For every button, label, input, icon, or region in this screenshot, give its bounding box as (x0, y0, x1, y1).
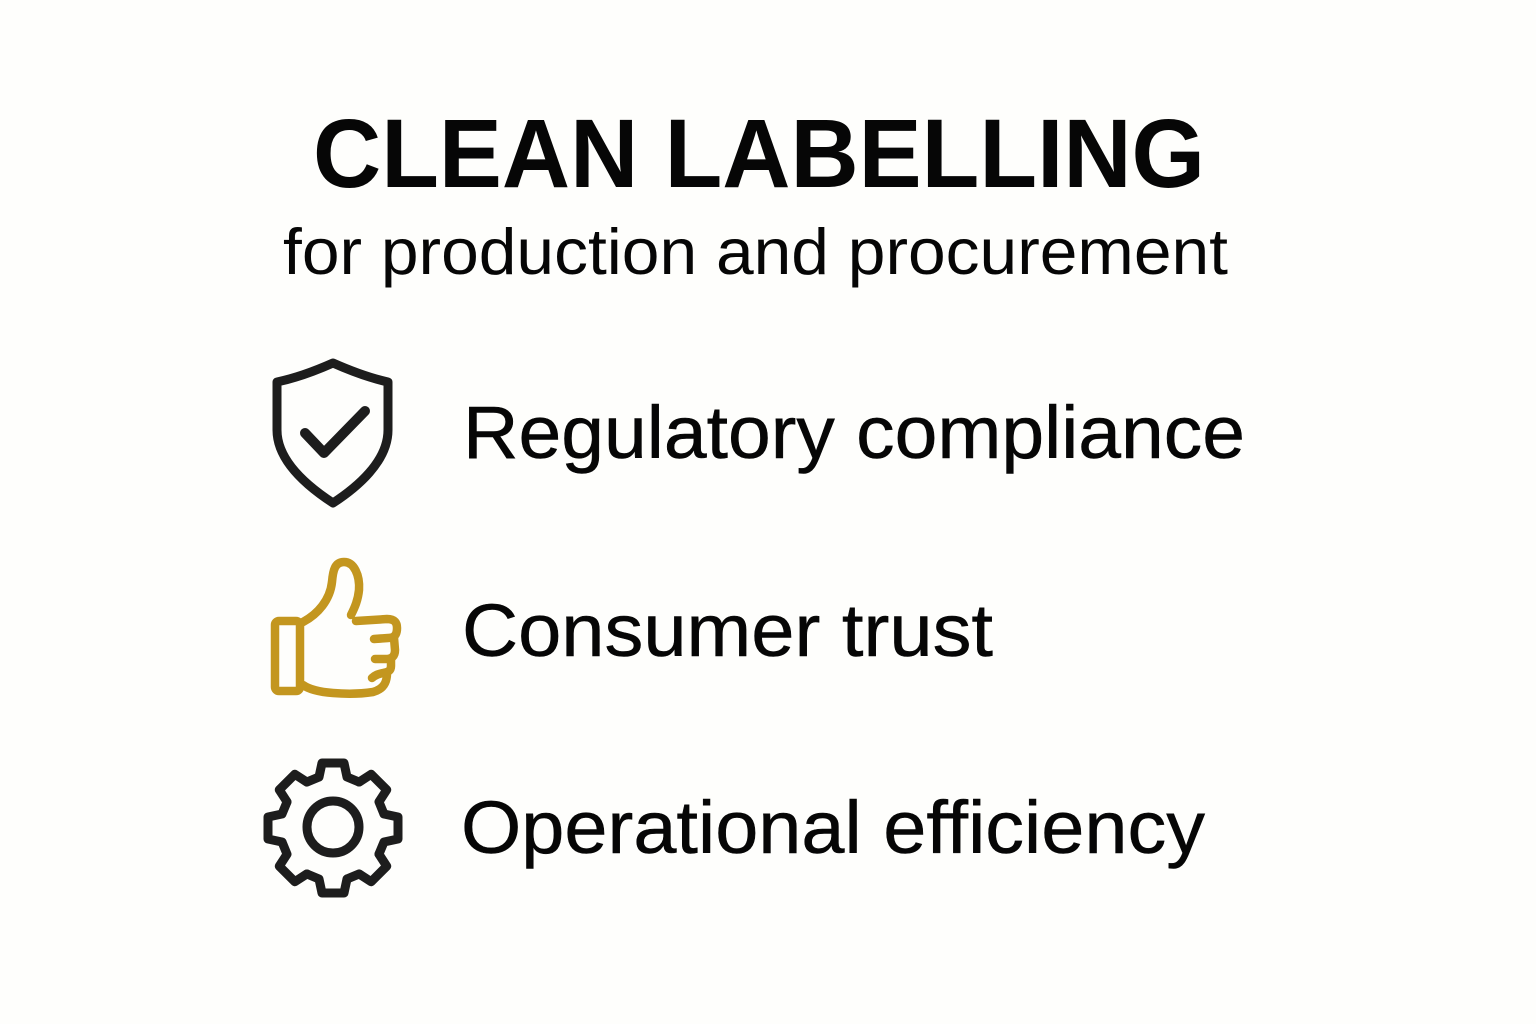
item: consumer trust (275, 562, 993, 694)
item: regulatory compliance (277, 363, 1245, 503)
icon: thumbs up (275, 562, 397, 694)
label: consumer trust: Consumer trust (462, 589, 993, 672)
title: CLEAN LABELLING (313, 99, 1205, 208)
subtitle: for production and procurement (283, 215, 1228, 288)
item: operational efficiency (268, 763, 1205, 893)
icon: shield with check mark (277, 363, 388, 503)
icon: gear (268, 763, 398, 893)
label: regulatory compliance: Regulatory compliance (463, 391, 1245, 474)
label: operational efficiency: Operational efficiency (461, 786, 1205, 869)
